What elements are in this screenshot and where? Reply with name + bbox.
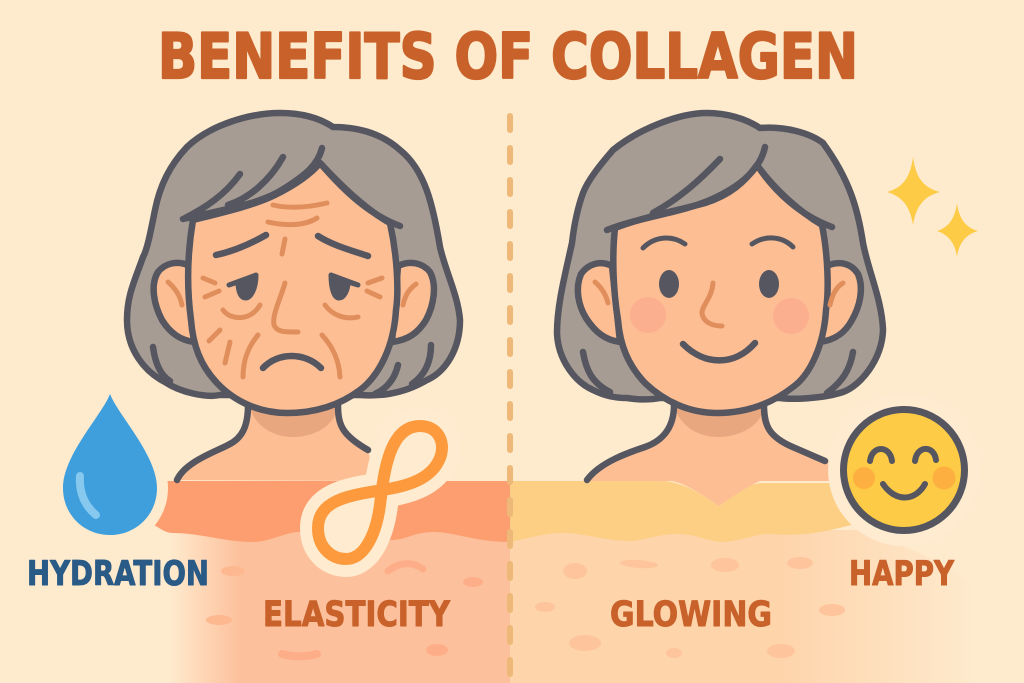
hair back (127, 113, 460, 396)
label: hydration: HYDRATION (27, 554, 209, 593)
right ear (820, 263, 861, 342)
frown (263, 356, 321, 368)
center dashed divider (507, 116, 513, 680)
neck shadow (675, 408, 763, 437)
neck (587, 405, 835, 481)
icon: happy smiley (828, 394, 980, 546)
neck shadow (250, 408, 337, 437)
left eye (229, 275, 256, 298)
left ear (154, 263, 194, 342)
title: BENEFITS OF COLLAGEN (158, 20, 858, 93)
neck (177, 405, 375, 481)
ear inner lines (595, 282, 843, 305)
skin notch over band (672, 481, 760, 506)
face (613, 165, 828, 413)
icon: water drop (63, 394, 157, 535)
icon: sparkles (887, 157, 978, 257)
hair back (557, 113, 883, 400)
label: elasticity: ELASTICITY (263, 595, 451, 635)
left ear (578, 263, 620, 342)
portrait: youthful face (557, 113, 883, 506)
eyebrows (643, 238, 793, 248)
ear inner lines (168, 282, 416, 305)
neck lines (177, 405, 368, 480)
smile (683, 343, 755, 360)
label: happy: HAPPY (849, 554, 955, 593)
skin layers: after side (510, 481, 990, 683)
portrait: aged face (127, 113, 460, 481)
neck lines (587, 405, 825, 480)
wrinkles (203, 203, 382, 377)
fringe strands (153, 148, 431, 394)
eyebrows (216, 235, 368, 256)
right eye (331, 275, 358, 298)
label: glowing: GLOWING (610, 595, 772, 635)
eyes (659, 270, 679, 298)
face (188, 163, 397, 413)
icon: elasticity loop (318, 426, 442, 559)
nose (702, 283, 722, 326)
fringe strands (583, 147, 853, 393)
skin layers: before side (150, 481, 510, 683)
right ear (392, 263, 434, 342)
cheeks (630, 297, 666, 333)
